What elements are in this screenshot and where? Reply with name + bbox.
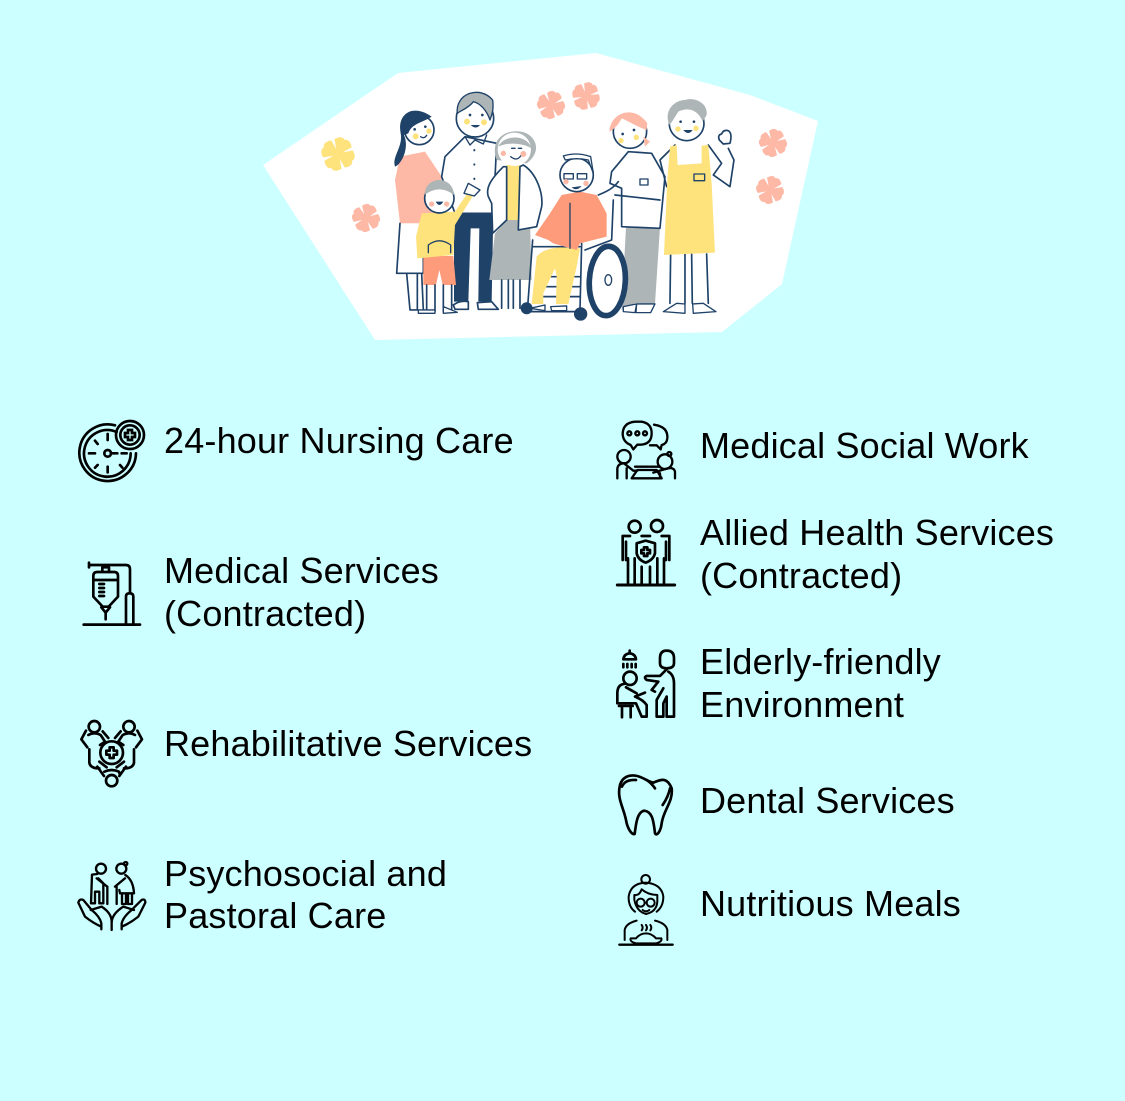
icon: IV drip (84, 563, 140, 625)
icon: assisted shower (617, 651, 674, 717)
label: Dental Services: Dental Services (700, 780, 955, 821)
female carer (598, 112, 665, 313)
icon: caring hands with seniors (78, 862, 145, 930)
father (442, 92, 498, 309)
illustration: family and carers group (394, 92, 734, 321)
icon: pink flower (753, 173, 787, 207)
grandfather in wheelchair (521, 154, 627, 321)
male carer in apron (660, 99, 734, 313)
label: Nutritious Meals: Nutritious Meals (700, 883, 961, 924)
child (416, 180, 480, 313)
grandmother (488, 131, 542, 308)
label: Allied Health Services (Contracted): Allied Health Services (700, 512, 1054, 553)
label: Medical Services (Contracted): (Contracted) (164, 593, 366, 634)
icon: pink flower (568, 78, 604, 114)
icon: yellow flower (317, 133, 359, 175)
label: Psychosocial and Pastoral Care: Pastoral Care (164, 895, 386, 936)
panel: white illustration backdrop (263, 53, 818, 340)
label: Medical Social Work: Medical Social Work (700, 425, 1030, 466)
icon: pink flower (756, 126, 790, 160)
label: 24-hour Nursing Care: 24-hour Nursing Care (164, 420, 514, 461)
icon: pink flower (534, 88, 568, 122)
label: Psychosocial and Pastoral Care: Psychosocial and (164, 853, 447, 894)
icon: tooth (619, 775, 672, 834)
label: Rehabilitative Services: Rehabilitative Services (164, 723, 532, 764)
label: Elderly-friendly Environment: Elderly-friendly (700, 641, 941, 682)
label: Medical Services (Contracted): Medical Services (164, 550, 439, 591)
icon: nutritious meals (619, 875, 673, 945)
icon: allied health team (617, 520, 675, 585)
label: Allied Health Services (Contracted): (Contracted) (700, 555, 902, 596)
icon: rehabilitation people (81, 721, 142, 786)
mother (394, 111, 442, 310)
icon: pink flower (349, 201, 383, 235)
icon: 24-hour clock (79, 421, 144, 481)
icon: medical social work (617, 422, 675, 478)
label: Elderly-friendly Environment: Environment (700, 684, 904, 725)
